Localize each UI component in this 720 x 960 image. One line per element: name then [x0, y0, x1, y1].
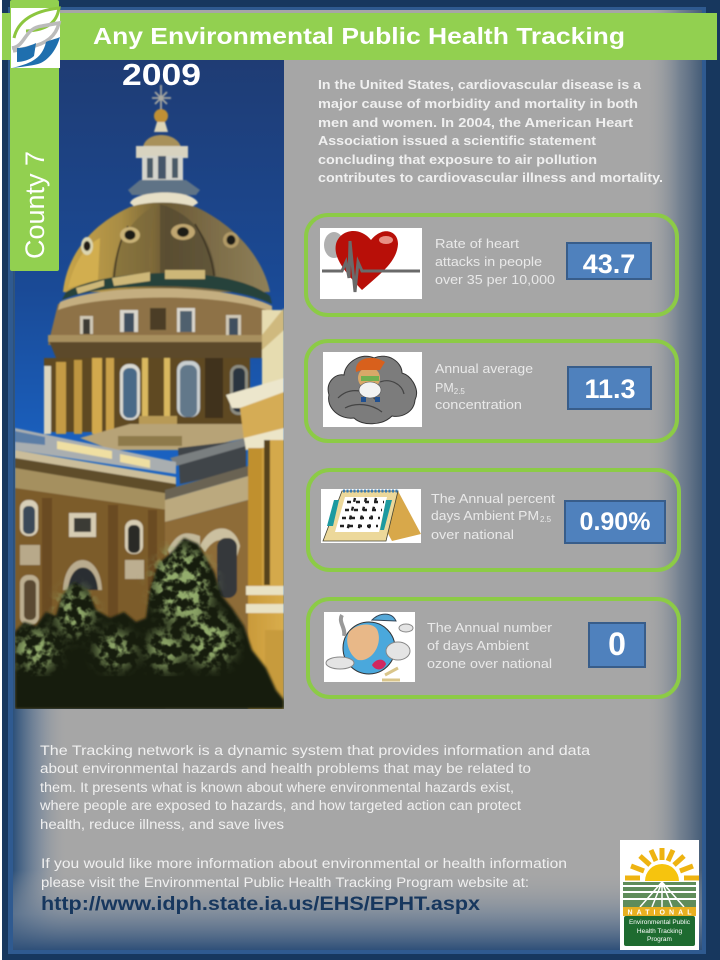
center wing	[165, 476, 248, 522]
label: concentration	[435, 398, 522, 412]
label: Annual average	[435, 362, 533, 376]
body text: more information: please visit the Environmental Public Health Tracking Program website at:	[41, 875, 529, 890]
body text: tracking network: about environmental hazards and health problems that may be related to	[40, 761, 531, 776]
label: over 35 per 10,000	[435, 273, 555, 287]
label: The Annual number	[427, 621, 552, 635]
body text: more information	[41, 856, 567, 890]
label: attacks in people	[435, 255, 542, 269]
label: 2.5	[454, 387, 465, 396]
value	[568, 367, 651, 409]
photo: capitol dome	[14, 60, 284, 710]
value: 11.3	[584, 374, 636, 404]
label	[435, 362, 533, 412]
icon: calendar	[321, 489, 421, 543]
body text: tracking network: them. It presents what is known about where environmental hazards exist,	[40, 780, 514, 795]
left wing	[15, 450, 176, 486]
panel: days ozone over national	[308, 599, 679, 697]
drum	[47, 296, 266, 346]
intro text: concluding that exposure to air pollution	[318, 152, 597, 167]
body text: tracking network	[39, 743, 591, 832]
body text: tracking network: health, reduce illness, and save lives	[40, 817, 284, 832]
intro text: major cause of morbidity and mortality in both	[318, 96, 638, 111]
platform	[80, 424, 246, 450]
label: ozone over national	[427, 657, 552, 671]
side tab: county	[10, 0, 59, 271]
body text: tracking network: The Tracking network is a dynamic system that provides information and data	[40, 743, 591, 758]
label: of days Ambient	[427, 639, 530, 653]
value: 0.90%	[580, 508, 650, 536]
body text: more information: If you would like more information about environmental or health information	[41, 856, 567, 871]
value	[565, 501, 665, 543]
icon: heart	[320, 228, 422, 299]
icon: national tracking program logo: Health Tracking	[637, 928, 682, 935]
panel: heart attacks	[306, 215, 677, 315]
cross finial	[152, 85, 171, 112]
body text: tracking network: where people are exposed to hazards, and how targeted action can protect	[39, 798, 521, 813]
right yellow wing	[248, 440, 284, 710]
panel: PM2.5 concentration	[306, 341, 677, 441]
icon: smog cloud	[323, 352, 422, 427]
icon: tracking logo	[11, 8, 60, 68]
intro text	[318, 77, 663, 185]
label: Rate of heart	[435, 237, 520, 251]
balustrade	[15, 428, 176, 474]
value	[589, 623, 645, 667]
label: The Annual percent	[431, 492, 556, 506]
dome ring	[62, 273, 272, 304]
label: PM	[435, 381, 454, 395]
label: 2.5	[540, 515, 552, 524]
heading banner	[2, 13, 717, 60]
label	[427, 621, 552, 671]
intro text: men and women. In 2004, the American Heart	[318, 115, 634, 130]
icon: national tracking program logo	[620, 840, 699, 950]
icon: national tracking program logo: Program	[647, 936, 672, 943]
intro text: contributes to cardiovascular illness and mortality.	[318, 170, 663, 185]
icon: national tracking program logo: Environmental Public	[629, 919, 691, 926]
dome body	[63, 202, 270, 292]
value: 43.7	[583, 249, 635, 279]
link: http://www.idph.state.ia.us/EHS/EPHT.aspx	[41, 894, 480, 915]
label	[435, 237, 555, 287]
intro text: Association issued a scientific statement	[318, 133, 597, 148]
value	[567, 243, 651, 279]
title: Any Environmental Public Health Tracking	[93, 23, 625, 49]
intro text: In the United States, cardiovascular disease is a	[318, 77, 642, 92]
county label: County 7	[20, 151, 50, 259]
label: days Ambient PM	[431, 509, 539, 523]
icon: polluted earth	[324, 612, 415, 682]
year: 2009	[122, 57, 201, 92]
icon: national tracking program logo: NATIONAL	[628, 910, 692, 916]
value: 0	[608, 626, 626, 662]
trees	[14, 538, 284, 709]
label	[431, 492, 556, 542]
panel: percent days PM2.5 over national	[308, 470, 679, 570]
label: over national	[431, 528, 514, 542]
